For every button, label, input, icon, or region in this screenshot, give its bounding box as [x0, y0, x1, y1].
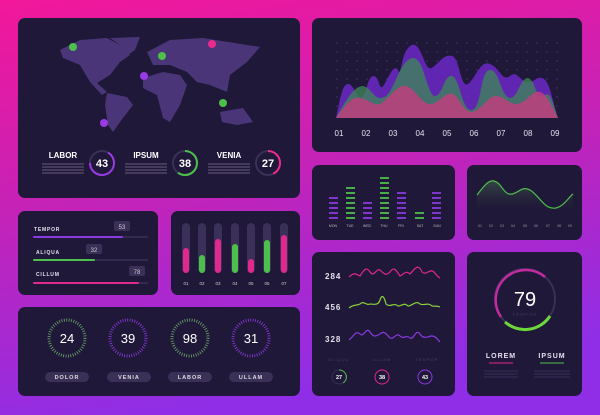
panel: area chart	[312, 18, 582, 152]
panel: dial circles: 31	[244, 331, 258, 346]
panel: gauge	[467, 252, 582, 396]
panel: progress bars: 32	[91, 248, 98, 254]
panel: vertical bars: 03	[215, 281, 221, 286]
panel: wave lines: ALIQUA	[329, 357, 349, 362]
stat: labor	[42, 147, 118, 179]
purple area	[336, 45, 558, 118]
panel: wave lines: 38	[379, 375, 385, 381]
panel: gauge: LOREM	[486, 353, 516, 360]
panel: dial circles: VENIA	[118, 375, 140, 381]
panel: dial circles: ULLAM	[239, 375, 263, 381]
panel: progress bars: 53	[119, 225, 126, 231]
panel: line chart: 07	[546, 224, 550, 228]
x labels: 06	[470, 129, 479, 138]
panel: line chart: 05	[523, 224, 527, 228]
panel: vertical bars: 07	[281, 281, 287, 286]
stat: labor: LABOR	[49, 151, 77, 160]
x labels: 07	[497, 129, 506, 138]
x labels: 09	[551, 129, 560, 138]
panel: gauge: TEMPOR	[512, 312, 538, 317]
panel: equalizer bars: FRI	[398, 224, 404, 228]
panel: dial circles: 39	[121, 331, 135, 346]
x labels: 03	[389, 129, 398, 138]
x labels: 08	[524, 129, 533, 138]
panel: wave lines: 43	[422, 375, 428, 381]
stat: venia: 27	[262, 158, 274, 170]
panel: line chart: 01	[478, 224, 482, 228]
panel: wave lines	[312, 252, 455, 396]
panel: dial circles	[18, 307, 300, 396]
panel: equalizer bars: SUN	[433, 224, 441, 228]
panel: vertical bars: 06	[264, 281, 270, 286]
panel: progress bars: CILLUM	[36, 272, 60, 278]
panel: wave lines: 456	[325, 303, 341, 312]
panel: line chart: 06	[534, 224, 538, 228]
world map	[60, 37, 260, 132]
x labels: 01	[335, 129, 344, 138]
panel: vertical bars: 02	[199, 281, 205, 286]
panel: dial circles: 98	[183, 331, 197, 346]
map pins	[69, 40, 227, 127]
panel: equalizer bars: WED	[363, 224, 372, 228]
green area	[336, 58, 558, 118]
panel: equalizer bars	[312, 165, 455, 240]
panel: world map	[18, 18, 300, 198]
stat: labor: 43	[96, 158, 108, 170]
panel: progress bars: 78	[134, 270, 141, 276]
panel: dial circles: 24	[60, 331, 74, 346]
panel: vertical bars: 01	[183, 281, 189, 286]
panel: gauge: 79	[514, 289, 536, 311]
panel: dial circles: LABOR	[178, 375, 202, 381]
stat: ipsum	[125, 151, 197, 175]
panel: line chart: 08	[557, 224, 561, 228]
panel: line chart: 03	[500, 224, 504, 228]
x labels: 02	[362, 129, 371, 138]
panel: dial circles: DOLOR	[55, 375, 79, 381]
x labels: 04	[416, 129, 425, 138]
panel: line chart: 09	[568, 224, 572, 228]
panel: equalizer bars: MON	[329, 224, 338, 228]
stat: ipsum: 38	[179, 158, 191, 170]
panel: wave lines: 27	[336, 375, 342, 381]
panel: progress bars: ALIQUA	[36, 250, 60, 256]
x labels: 05	[443, 129, 452, 138]
panel: gauge: IPSUM	[538, 353, 566, 360]
stat: ipsum: IPSUM	[133, 151, 159, 160]
panel: line chart: 04	[511, 224, 515, 228]
panel: equalizer bars: SAT	[417, 224, 424, 228]
panel: progress bars	[18, 211, 158, 295]
stat: venia: VENIA	[217, 151, 241, 160]
stat: venia	[208, 151, 280, 175]
panel: wave lines: TEMPOR	[415, 357, 439, 362]
panel: line chart: 02	[489, 224, 493, 228]
pink area	[336, 86, 558, 118]
panel: vertical bars: 04	[232, 281, 238, 286]
x labels	[335, 129, 560, 138]
panel: progress bars: TEMPOR	[34, 227, 60, 233]
panel: equalizer bars: THU	[380, 224, 388, 228]
panel: equalizer bars: TUE	[346, 224, 354, 228]
panel: wave lines: 284	[325, 272, 341, 281]
panel: wave lines: 328	[325, 335, 341, 344]
panel: vertical bars: 05	[248, 281, 254, 286]
panel: line chart	[467, 165, 582, 240]
panel: wave lines: ULLAM	[373, 357, 391, 362]
panel: vertical bars	[171, 211, 300, 295]
